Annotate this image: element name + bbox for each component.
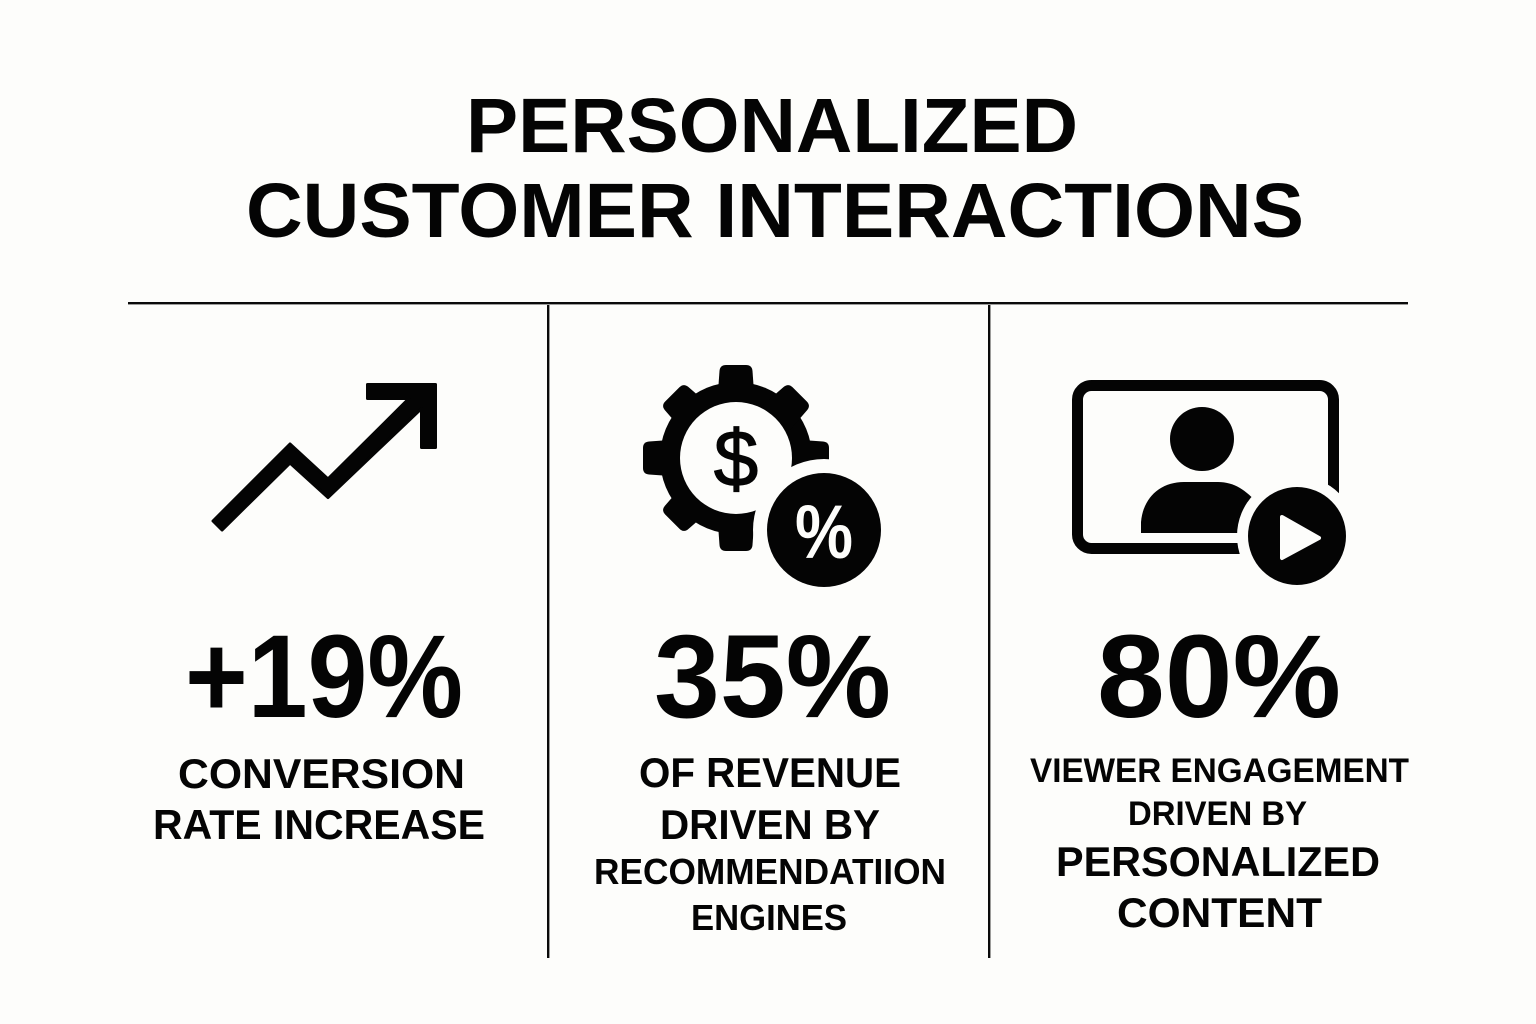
icon: gear with dollar and percent badge: % [795,490,853,575]
label: of revenue driven by recommendation engines: OF REVENUE [639,749,901,796]
label: of revenue driven by recommendation engines: RECOMMENDATIION [594,851,946,892]
icon: gear with dollar and percent badge [643,365,895,601]
label: conversion rate increase: CONVERSION [178,750,465,797]
label: viewer engagement driven by personalized content [1030,752,1409,936]
stat: +19%: +19% [185,611,463,743]
label: of revenue driven by recommendation engines [594,749,946,938]
stat: 35%: 35% [654,611,891,743]
label: of revenue driven by recommendation engines: DRIVEN BY [660,801,880,848]
panel: revenue [594,365,946,938]
label: viewer engagement driven by personalized content: VIEWER ENGAGEMENT [1030,752,1409,790]
label: viewer engagement driven by personalized content: PERSONALIZED [1056,838,1380,885]
label: conversion rate increase: RATE INCREASE [153,801,485,848]
label: conversion rate increase [153,750,485,848]
title: PERSONALIZED [466,83,1078,169]
panel: viewer engagement [1030,386,1409,936]
title [246,83,1304,254]
label: viewer engagement driven by personalized content: CONTENT [1117,889,1322,936]
label: viewer engagement driven by personalized content: DRIVEN BY [1128,795,1307,833]
icon: gear with dollar and percent badge: $ [714,414,758,503]
title: CUSTOMER INTERACTIONS [246,168,1304,254]
icon: rising arrow [213,384,436,530]
stat: 80%: 80% [1097,611,1341,743]
panel: conversion rate [153,384,485,848]
icon: video frame with person and play badge [1078,386,1357,596]
label: of revenue driven by recommendation engines: ENGINES [691,897,847,938]
